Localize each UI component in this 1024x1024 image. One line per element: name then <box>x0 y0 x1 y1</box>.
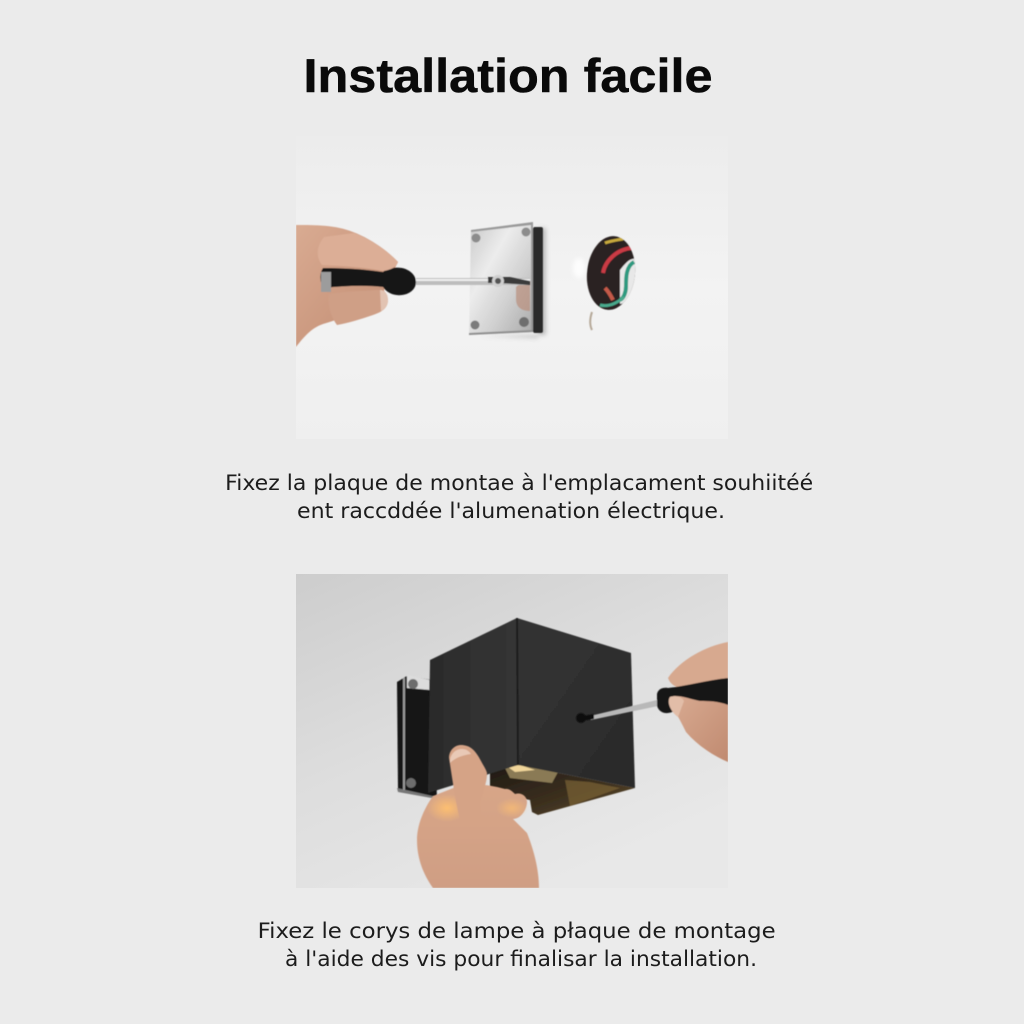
text block: step 2 caption: Fixez le corys de lampe à płaque de montage <box>258 919 776 943</box>
icon: black cube lamp <box>428 618 635 815</box>
icon: mounting plate <box>469 222 546 338</box>
title: Installation facile <box>304 49 712 102</box>
icon: bottom hand <box>417 745 539 888</box>
icon: top hand with screwdriver <box>576 642 728 762</box>
icon: screwdriver and hand <box>296 225 530 347</box>
text block: step 1 caption: Fixez la plaque de montae à l'emplacament souhiitéé <box>225 471 813 495</box>
text block: step 1 caption: ent raccddée l'alumenation électrique. <box>297 499 725 523</box>
panel: step 1 photo <box>296 222 636 347</box>
icon: mounting bracket <box>397 675 437 799</box>
text block: step 2 caption: à l'aide des vis pour finalisar la installation. <box>285 947 757 971</box>
panel: step 2 photo <box>296 574 728 888</box>
icon: wall hole with wires <box>573 234 639 330</box>
